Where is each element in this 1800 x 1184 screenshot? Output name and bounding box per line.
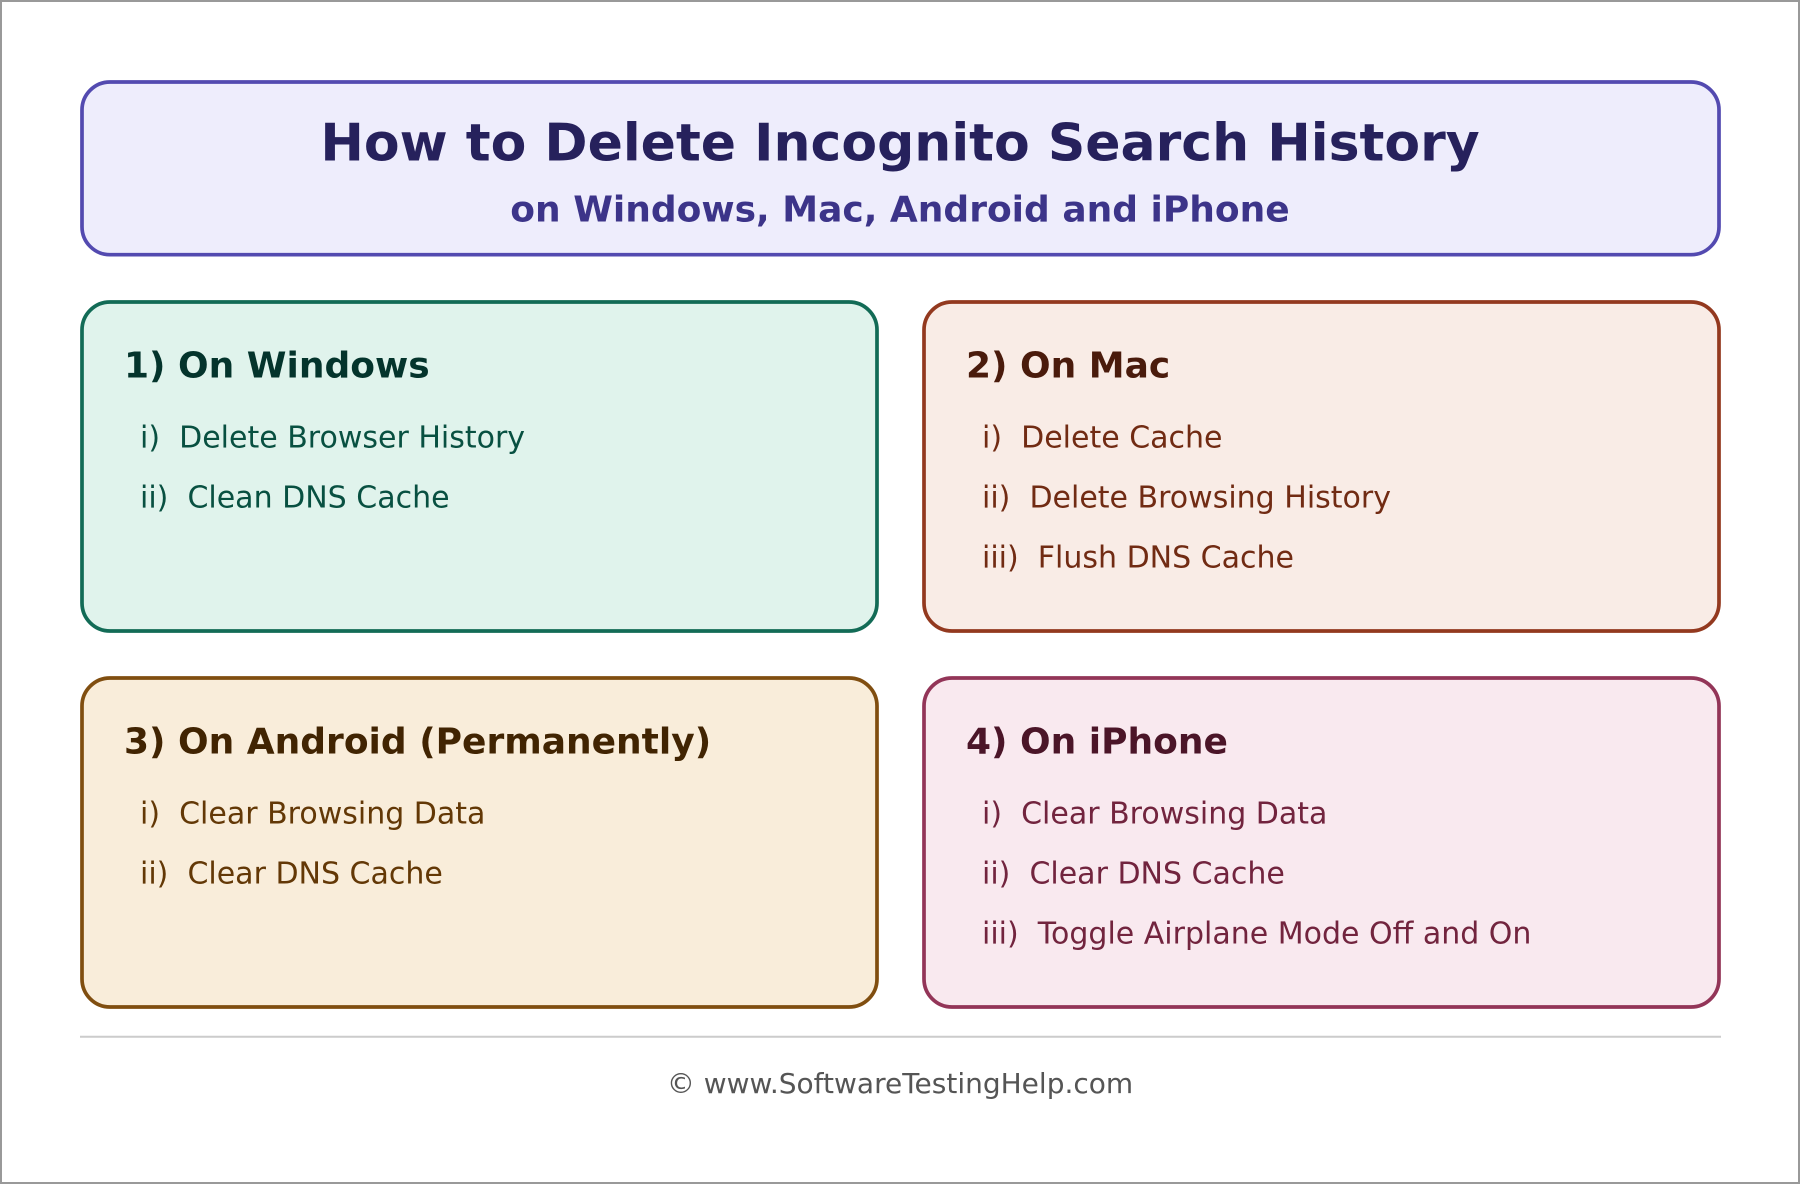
heading: On Mac: 2) On Mac	[966, 346, 1170, 386]
subtitle: on Windows, Mac, Android and iPhone	[510, 190, 1290, 230]
title: How to Delete Incognito Search History	[320, 114, 1480, 174]
list: Windows steps: i) Delete Browser History	[140, 420, 525, 456]
list: iPhone steps: i) Clear Browsing Data	[982, 797, 1327, 832]
heading: On Windows: 1) On Windows	[124, 346, 430, 386]
heading: On Android: 3) On Android (Permanently)	[124, 722, 711, 763]
list: Mac steps: ii) Delete Browsing History	[982, 480, 1391, 516]
list: Windows steps: ii) Clean DNS Cache	[140, 480, 450, 516]
list: Android steps	[140, 797, 485, 892]
list: iPhone steps: ii) Clear DNS Cache	[982, 857, 1285, 892]
list: Windows steps	[140, 420, 525, 516]
list: Mac steps	[982, 420, 1391, 576]
footer: © www.SoftwareTestingHelp.com	[667, 1067, 1133, 1100]
panel: On Mac	[924, 302, 1719, 631]
list: Android steps: i) Clear Browsing Data	[140, 797, 485, 832]
list: iPhone steps	[982, 797, 1531, 952]
list: Android steps: ii) Clear DNS Cache	[140, 857, 443, 892]
panel: On iPhone	[924, 678, 1719, 1007]
heading: On iPhone: 4) On iPhone	[966, 722, 1228, 763]
panel: On Android	[82, 678, 877, 1007]
list: Mac steps: iii) Flush DNS Cache	[982, 540, 1294, 576]
list: Mac steps: i) Delete Cache	[982, 420, 1223, 456]
list: iPhone steps: iii) Toggle Airplane Mode Off and On	[982, 917, 1531, 952]
title banner	[82, 82, 1719, 255]
panel: On Windows	[82, 302, 877, 631]
